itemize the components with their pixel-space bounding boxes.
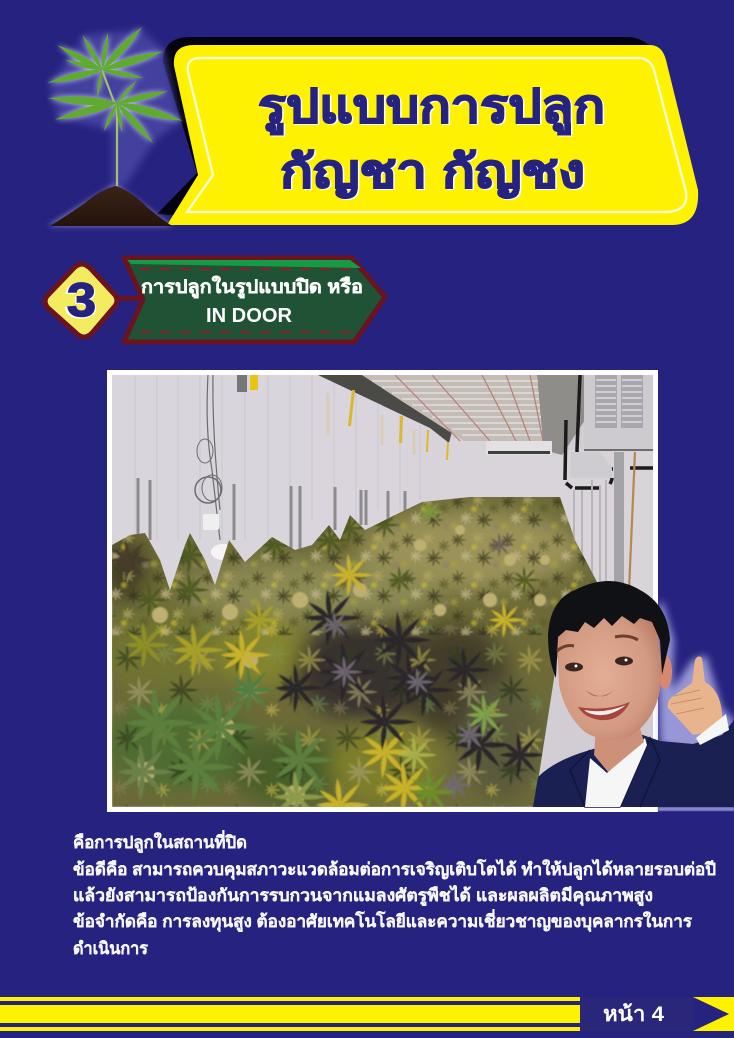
small tan buds xyxy=(109,499,541,618)
ceiling dark side xyxy=(537,375,585,455)
number: 3 xyxy=(67,273,96,326)
grow light red grid xyxy=(395,375,543,441)
secondary unit xyxy=(570,452,612,478)
heading line 2: IN DOOR xyxy=(206,305,293,327)
canopy blurred detail xyxy=(112,497,597,807)
banner inner outline xyxy=(187,58,686,212)
banner plate xyxy=(167,45,698,225)
soil mound xyxy=(50,186,172,226)
dense near leaves texture xyxy=(112,625,542,807)
face xyxy=(556,610,661,740)
arrow xyxy=(693,997,734,1031)
thumbs up hand xyxy=(668,656,729,745)
purple leaf highlights xyxy=(322,611,488,801)
support pole xyxy=(614,452,624,584)
green fan leaves xyxy=(119,668,508,807)
suit jacket xyxy=(533,720,734,807)
eyes and brows xyxy=(557,636,638,672)
nose xyxy=(586,690,614,696)
soil glow xyxy=(48,184,172,226)
title banner xyxy=(157,37,698,225)
right wall seams xyxy=(573,480,607,582)
plant soft halo xyxy=(50,30,180,186)
line 3: แล้วยังสามารถป้องกันการรบกวนจากแมลงศัตรูพืชได้ และผลผลิตมีคุณภาพสูง xyxy=(73,885,653,907)
avatar glow xyxy=(656,600,734,760)
bright buds xyxy=(135,525,550,805)
neck xyxy=(594,728,644,772)
page number: หน้า 4 xyxy=(603,1002,664,1026)
orange pipe xyxy=(629,452,635,590)
ceiling beam xyxy=(318,375,452,443)
banner shadow xyxy=(157,37,655,225)
grow light stripes xyxy=(372,381,542,435)
photo content xyxy=(100,375,653,832)
plant canopy xyxy=(112,497,597,807)
title line 1: รูปแบบการปลูก xyxy=(258,80,605,135)
ear xyxy=(658,655,672,689)
icon: cannabis seedling in soil xyxy=(47,24,184,226)
ribbon body xyxy=(124,258,385,342)
hanging cables and sensor xyxy=(194,375,228,560)
large air handler xyxy=(584,375,653,450)
leaf glow xyxy=(47,24,184,145)
wall panel seams xyxy=(135,375,420,540)
right wall xyxy=(586,451,653,599)
canopy base xyxy=(112,495,602,807)
dense far buds texture xyxy=(112,495,602,635)
room walls xyxy=(112,375,653,807)
section number badge xyxy=(45,264,146,337)
canopy colour patches xyxy=(100,510,580,805)
connector xyxy=(112,296,146,301)
leaves xyxy=(47,24,184,145)
description text xyxy=(73,830,716,958)
photo frame xyxy=(107,370,658,812)
footer stripes xyxy=(0,997,580,1031)
wall AC unit xyxy=(486,441,552,455)
mouth xyxy=(578,702,630,720)
title line 2 shadow: กัญชา กัญชง xyxy=(282,146,586,199)
line 1: คือการปลูกในสถานที่ปิด xyxy=(73,830,247,854)
ribbon highlight xyxy=(127,260,361,268)
yellow tags and bracket xyxy=(237,375,448,460)
number shadow: 3 xyxy=(65,274,97,327)
purple dark leaves xyxy=(275,589,546,779)
line 2: ข้อดีคือ สามารถควบคุมสภาวะแวดล้อมต่อการเจริญเติบโตได้ ทำให้ปลูกได้หลายรอบต่อปี xyxy=(73,859,716,881)
ribbon stitching xyxy=(140,269,354,332)
title line 1 shadow: รูปแบบการปลูก xyxy=(260,81,606,136)
black conduit xyxy=(565,375,653,488)
title line 2: กัญชา กัญชง xyxy=(280,145,585,198)
hair xyxy=(548,581,670,678)
shirt xyxy=(585,738,647,807)
diamond xyxy=(45,264,117,337)
section heading ribbon xyxy=(124,258,385,342)
grow light panel xyxy=(362,375,543,441)
photo: indoor cannabis grow room xyxy=(100,370,658,832)
line 4: ข้อจำกัดคือ การลงทุนสูง ต้องอาศัยเทคโนโลยีและความเชี่ยวชาญของบุคลากรในการ xyxy=(73,909,693,933)
suit lapel xyxy=(570,738,660,807)
wall uprights xyxy=(138,478,405,552)
footer xyxy=(0,997,734,1031)
page number plate xyxy=(580,997,694,1031)
line 5: ดำเนินการ xyxy=(73,939,149,958)
back wall xyxy=(440,440,565,510)
frame underline glow xyxy=(658,807,734,811)
heading line 1: การปลูกในรูปแบบปิด หรือ xyxy=(141,275,363,299)
golden leaves xyxy=(124,553,525,832)
stem xyxy=(102,70,117,186)
character avatar xyxy=(533,581,734,811)
